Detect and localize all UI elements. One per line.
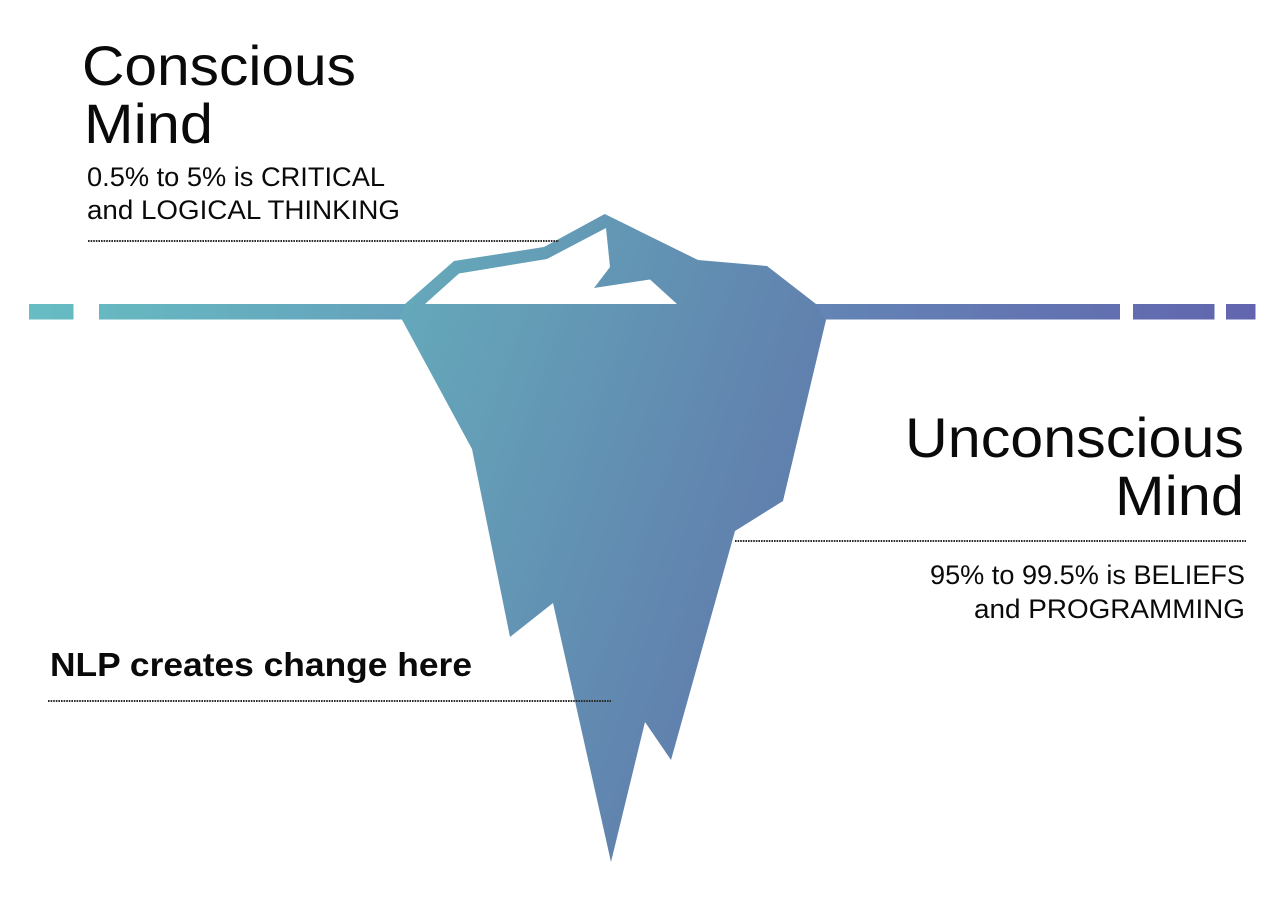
heading: unconscious mind xyxy=(905,406,1244,527)
iceberg xyxy=(400,214,826,862)
water line xyxy=(29,304,1256,320)
text: conscious mind description xyxy=(87,162,400,225)
dotted line: unconscious mind leader xyxy=(735,540,1246,542)
text: unconscious mind description: 95% to 99.5% is BELIEFS xyxy=(930,560,1245,590)
text: unconscious mind description xyxy=(930,560,1245,624)
dotted line: conscious mind leader xyxy=(88,240,559,242)
heading: unconscious mind: Unconscious xyxy=(905,406,1244,469)
text: conscious mind description: 0.5% to 5% is CRITICAL xyxy=(87,162,385,192)
dotted line: NLP leader xyxy=(48,700,611,702)
heading: conscious mind xyxy=(82,34,356,155)
text: unconscious mind description: and PROGRAMMING xyxy=(974,594,1245,624)
heading: unconscious mind: Mind xyxy=(1115,464,1244,527)
heading: conscious mind: Mind xyxy=(84,92,213,155)
callout: NLP creates change here: NLP creates change here xyxy=(50,646,472,683)
text: conscious mind description: and LOGICAL THINKING xyxy=(87,195,400,225)
heading: conscious mind: Conscious xyxy=(82,34,356,97)
